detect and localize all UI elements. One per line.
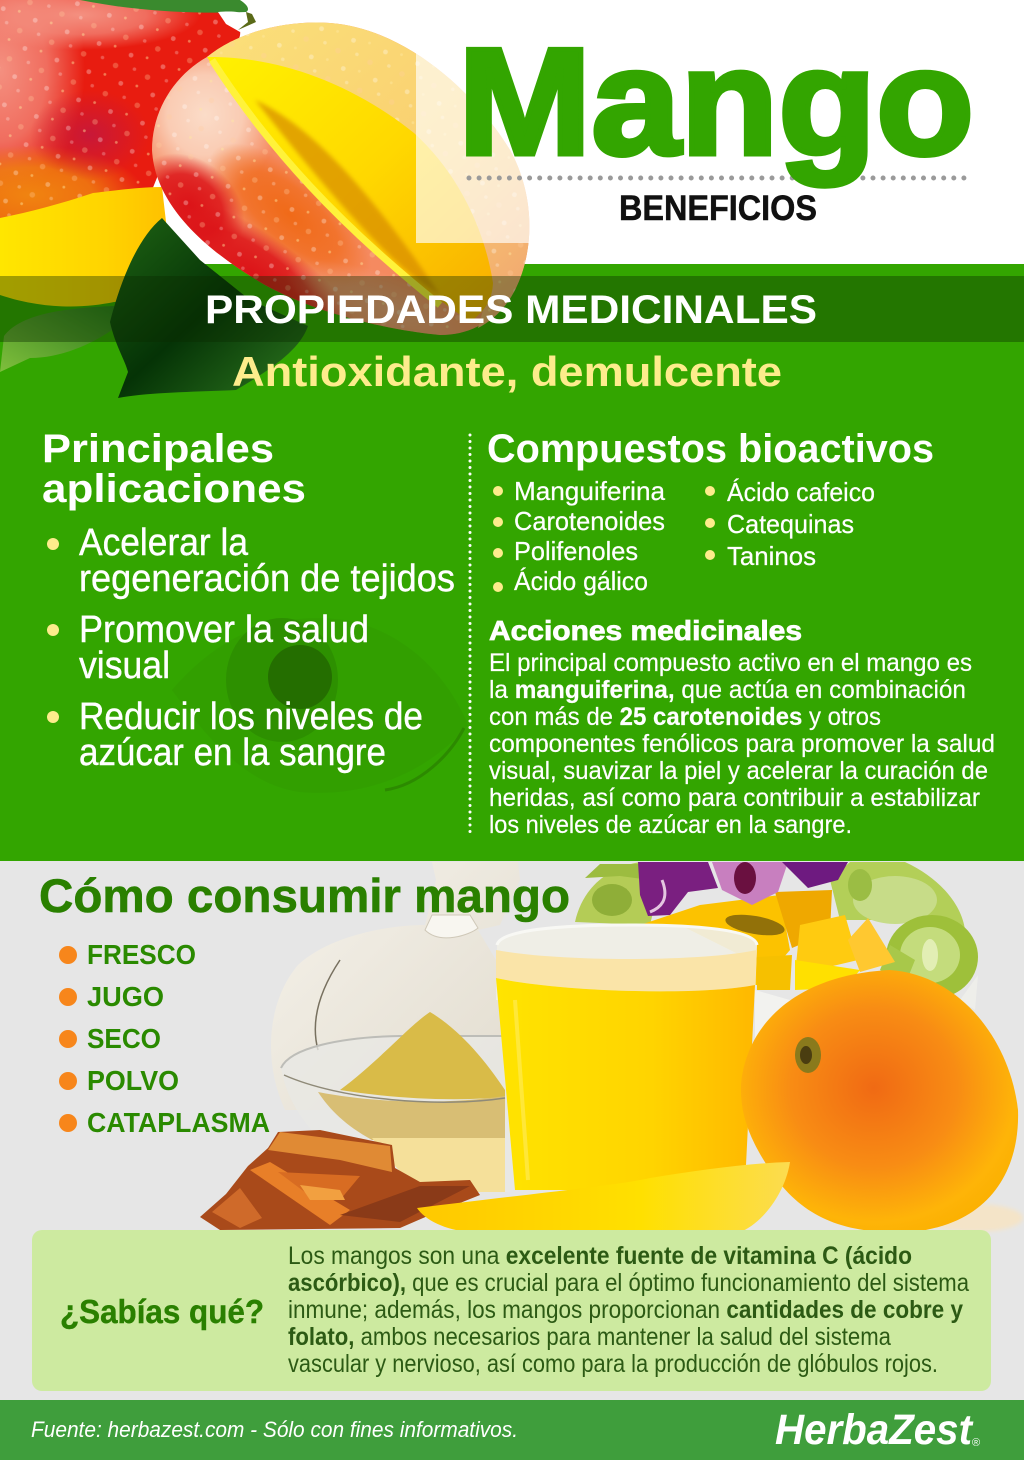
list: compounds: Taninos xyxy=(727,541,816,571)
list: applications: Reducir los niveles de xyxy=(79,696,423,738)
flesh fold xyxy=(255,100,440,295)
image: mango slice xyxy=(417,1162,790,1232)
list: ways to consume xyxy=(59,939,270,1138)
white bowl edge xyxy=(755,990,800,1060)
big mango yellow flesh xyxy=(207,57,493,322)
list: applications: azúcar en la sangre xyxy=(79,732,386,774)
red mango xyxy=(0,0,240,218)
image: juice glass xyxy=(496,925,757,1190)
text: medicinal actions description: El principal compuesto activo en el mango es xyxy=(489,649,972,677)
list: ways to consume: FRESCO xyxy=(87,939,196,970)
flesh of red mango xyxy=(0,187,175,306)
list: ways to consume: CATAPLASMA xyxy=(87,1107,270,1138)
list: compounds: Catequinas xyxy=(727,509,854,539)
list: applications: visual xyxy=(79,645,170,687)
heading: main applications: aplicaciones xyxy=(42,467,306,511)
top leaf xyxy=(80,0,248,13)
translucent white square xyxy=(416,48,550,243)
dotted column divider xyxy=(468,435,472,834)
text: medicinal actions description: con más de 25 carotenoides y otros xyxy=(489,703,881,731)
callout text: ascórbico), que es crucial para el óptimo funcionamiento del sistema xyxy=(288,1269,969,1297)
small leaf left xyxy=(0,306,114,372)
image: bowl of mango powder xyxy=(281,1012,510,1192)
list: applications: Acelerar la xyxy=(79,522,249,564)
callout text: inmune; además, los mangos proporcionan cantidades de cobre y xyxy=(288,1296,963,1324)
chia seeds xyxy=(724,911,786,939)
subheading: properties: Antioxidante, demulcente xyxy=(232,348,782,395)
kiwi slices xyxy=(575,862,665,925)
source note: Fuente: herbazest.com - Sólo con fines informativos. xyxy=(31,1417,518,1442)
heading: main applications xyxy=(42,427,306,511)
list: compounds: Ácido cafeico xyxy=(727,477,875,507)
heading: main applications: Principales xyxy=(42,427,274,471)
list: compounds: Ácido gálico xyxy=(514,566,648,596)
background: white header xyxy=(0,0,1024,264)
registered mark: ® xyxy=(972,1437,980,1449)
text: medicinal actions description: heridas, así como para contribuir a estabilizar xyxy=(489,784,980,812)
callout text: folato, ambos necesarios para mantener la salud del sistema xyxy=(288,1323,891,1351)
big dark leaf xyxy=(110,218,308,398)
heading: medicinal properties: PROPIEDADES MEDICINALES xyxy=(205,288,817,332)
text: medicinal actions description: la manguiferina, que actúa en combinación xyxy=(489,676,966,704)
title: Mango xyxy=(458,17,974,187)
dotted rule xyxy=(469,176,970,180)
heading: how to consume mango: Cómo consumir mango xyxy=(39,869,570,922)
list: compounds: Polifenoles xyxy=(514,536,638,566)
image: fruit bowl with kiwi, orchid and mango cubes xyxy=(575,862,978,1060)
callout heading: ¿Sabías qué? xyxy=(60,1293,264,1330)
list: compounds: Manguiferina xyxy=(514,476,666,506)
text: medicinal actions description: componentes fenólicos para promover la salud xyxy=(489,730,995,758)
list: ways to consume: POLVO xyxy=(87,1065,179,1096)
panel: green properties background xyxy=(0,264,1024,861)
text: medicinal actions description: los niveles de azúcar en la sangre. xyxy=(489,811,852,839)
text: medicinal actions description: visual, suavizar la piel y acelerar la curación de xyxy=(489,757,988,785)
list: applications: Promover la salud xyxy=(79,609,369,651)
footer bar xyxy=(0,1400,1024,1460)
callout text: Los mangos son una excelente fuente de vitamina C (ácido xyxy=(288,1242,912,1270)
text: medicinal actions description xyxy=(489,649,995,839)
list: applications xyxy=(47,522,455,774)
callout text: vascular y nervioso, así como para la producción de glóbulos rojos. xyxy=(288,1350,938,1378)
list: ways to consume: JUGO xyxy=(87,981,164,1012)
orchid xyxy=(638,862,718,916)
mango cubes xyxy=(640,895,790,985)
image: dried mango xyxy=(200,1130,480,1230)
big mango top skin xyxy=(207,22,529,328)
image: whole mango xyxy=(741,970,1023,1232)
panel: did you know callout xyxy=(32,1230,991,1391)
logo: HerbaZest: HerbaZest xyxy=(775,1406,974,1454)
subtitle: BENEFICIOS xyxy=(619,189,817,228)
list: ways to consume: SECO xyxy=(87,1023,161,1054)
list: applications: regeneración de tejidos xyxy=(79,558,455,600)
callout text xyxy=(288,1242,969,1378)
image: mangoes and leaves xyxy=(0,0,540,398)
list: compounds: Carotenoides xyxy=(514,506,665,536)
image: eye watermark xyxy=(172,618,468,793)
dark band xyxy=(0,276,1024,342)
heading: bioactive compounds: Compuestos bioactivos xyxy=(487,427,934,471)
image: poultice bag xyxy=(271,862,520,1110)
list: compounds xyxy=(493,476,875,596)
heading: medicinal actions: Acciones medicinales xyxy=(489,615,802,646)
big mango skin xyxy=(152,22,530,335)
panel: grey consumption background xyxy=(0,861,1024,1400)
